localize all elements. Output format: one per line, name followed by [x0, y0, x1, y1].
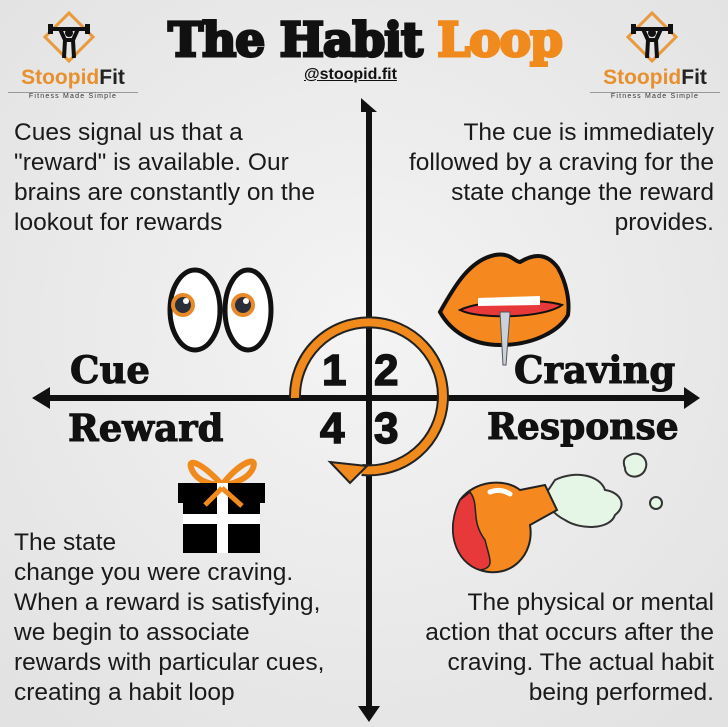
text: craving: state change the reward — [451, 179, 714, 206]
text: cue: Cues signal us that a — [14, 119, 243, 146]
text: craving: followed by a craving for the — [409, 149, 714, 176]
icon: flask — [453, 454, 662, 572]
text: craving: provides. — [615, 209, 714, 236]
handle: @stoopid.fit — [304, 66, 397, 83]
text: reward — [14, 529, 324, 706]
text: cue: brains are constantly on the — [14, 179, 315, 206]
numbers: 4 — [320, 404, 344, 453]
text: craving: The cue is immediately — [463, 119, 714, 146]
text: cue: "reward" is available. Our — [14, 149, 289, 176]
logo text right: StoopidFit — [603, 66, 707, 89]
text: reward: When a reward is satisfying, — [14, 589, 320, 616]
text: reward: rewards with particular cues, — [14, 649, 324, 676]
logo text right: Fitness Made Simple — [611, 93, 699, 100]
icon: gift — [178, 462, 265, 553]
axes — [32, 98, 700, 722]
text: response: craving. The actual habit — [448, 649, 714, 676]
title: The Habit Loop — [168, 13, 562, 68]
text: response: The physical or mental — [468, 589, 714, 616]
text: response: action that occurs after the — [425, 619, 714, 646]
label: response: Response — [487, 406, 679, 448]
text: reward: change you were craving. — [14, 559, 293, 586]
numbers — [320, 346, 398, 453]
numbers: 3 — [374, 404, 398, 453]
icon: lips — [440, 254, 569, 365]
numbers: 1 — [322, 346, 346, 395]
text: response — [425, 589, 714, 706]
loop arrow — [295, 322, 443, 483]
logo text left: Fitness Made Simple — [29, 93, 117, 100]
text: reward: creating a habit loop — [14, 679, 235, 706]
logo right — [628, 13, 676, 61]
logo text left: StoopidFit — [21, 66, 125, 89]
label: cue: Cue — [70, 348, 150, 392]
label: craving: Craving — [514, 348, 675, 392]
logo text left — [8, 66, 138, 100]
icon: eyes — [170, 270, 271, 350]
logo left — [45, 13, 93, 61]
text: cue — [14, 119, 315, 236]
text: reward: The state — [14, 529, 116, 556]
numbers: 2 — [374, 346, 398, 395]
text: craving — [409, 119, 714, 236]
text: response: being performed. — [529, 679, 714, 706]
logo text right — [590, 66, 720, 100]
text: cue: lookout for rewards — [14, 209, 222, 236]
label: reward: Reward — [68, 406, 223, 450]
text: reward: we begin to associate — [14, 619, 250, 646]
